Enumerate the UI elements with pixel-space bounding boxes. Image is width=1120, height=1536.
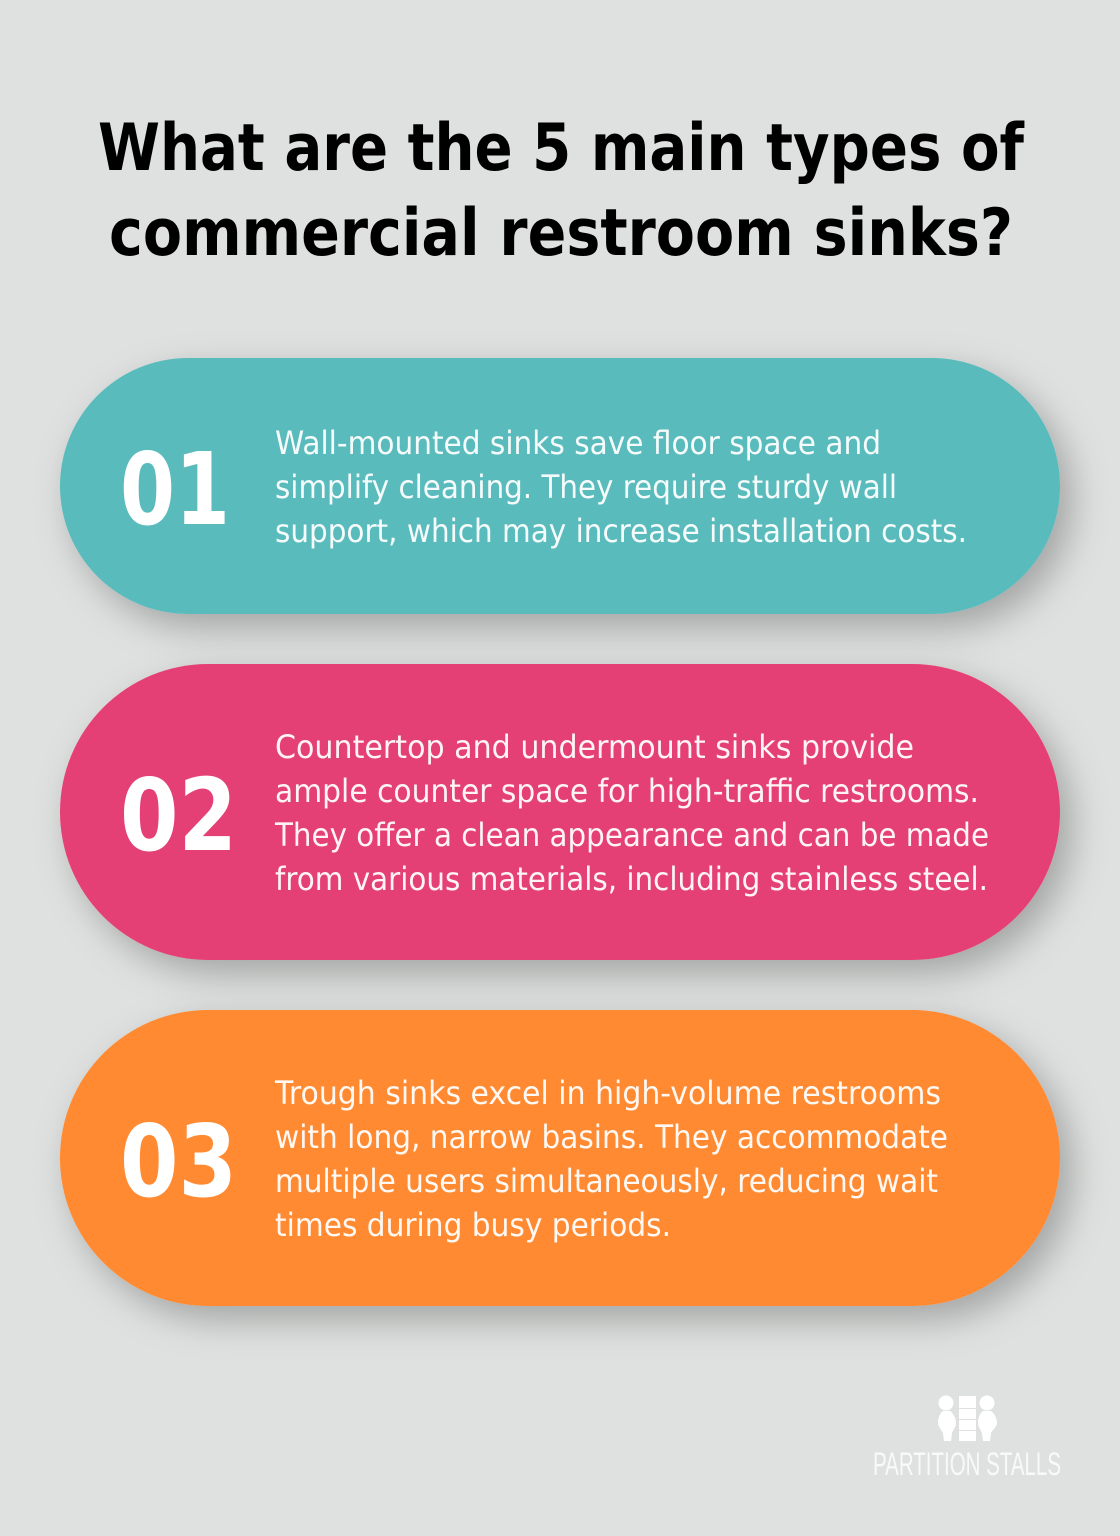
text block 03: multiple users simultaneously, reducing wait	[275, 1162, 938, 1200]
text block 02	[274, 728, 989, 898]
number 02: 02	[120, 757, 237, 874]
title	[98, 111, 1025, 271]
panel: 02 countertop and undermount sinks	[60, 664, 1060, 960]
icon: people and stall	[938, 1396, 997, 1441]
text block 02: Countertop and undermount sinks provide	[275, 728, 914, 766]
panel: 03 trough sinks	[60, 1010, 1060, 1306]
panel: 01 wall-mounted sinks	[60, 358, 1060, 614]
text block 03: Trough sinks excel in high-volume restrooms	[274, 1074, 941, 1112]
text block 02: They offer a clean appearance and can be made	[274, 816, 989, 854]
number 03: 03	[120, 1103, 237, 1220]
title: commercial restroom sinks?	[109, 196, 1013, 271]
text block 01: Wall-mounted sinks save floor space and	[275, 424, 881, 462]
number 01: 01	[120, 431, 230, 548]
text block 01: simplify cleaning. They require sturdy wall	[275, 468, 897, 506]
logo: Partition Stalls	[873, 1396, 1061, 1482]
text block 03: with long, narrow basins. They accommodate	[275, 1118, 948, 1156]
text block 02: from various materials, including stainless steel.	[275, 860, 988, 898]
text block 03	[274, 1074, 948, 1244]
text block 02: ample counter space for high-traffic restrooms.	[275, 772, 979, 810]
pill background orange	[60, 1010, 1060, 1306]
pill background pink	[60, 664, 1060, 960]
text block 01: support, which may increase installation costs.	[275, 512, 967, 550]
text block 03: times during busy periods.	[275, 1206, 671, 1244]
pill background teal	[60, 358, 1060, 614]
text block 01	[275, 424, 967, 550]
